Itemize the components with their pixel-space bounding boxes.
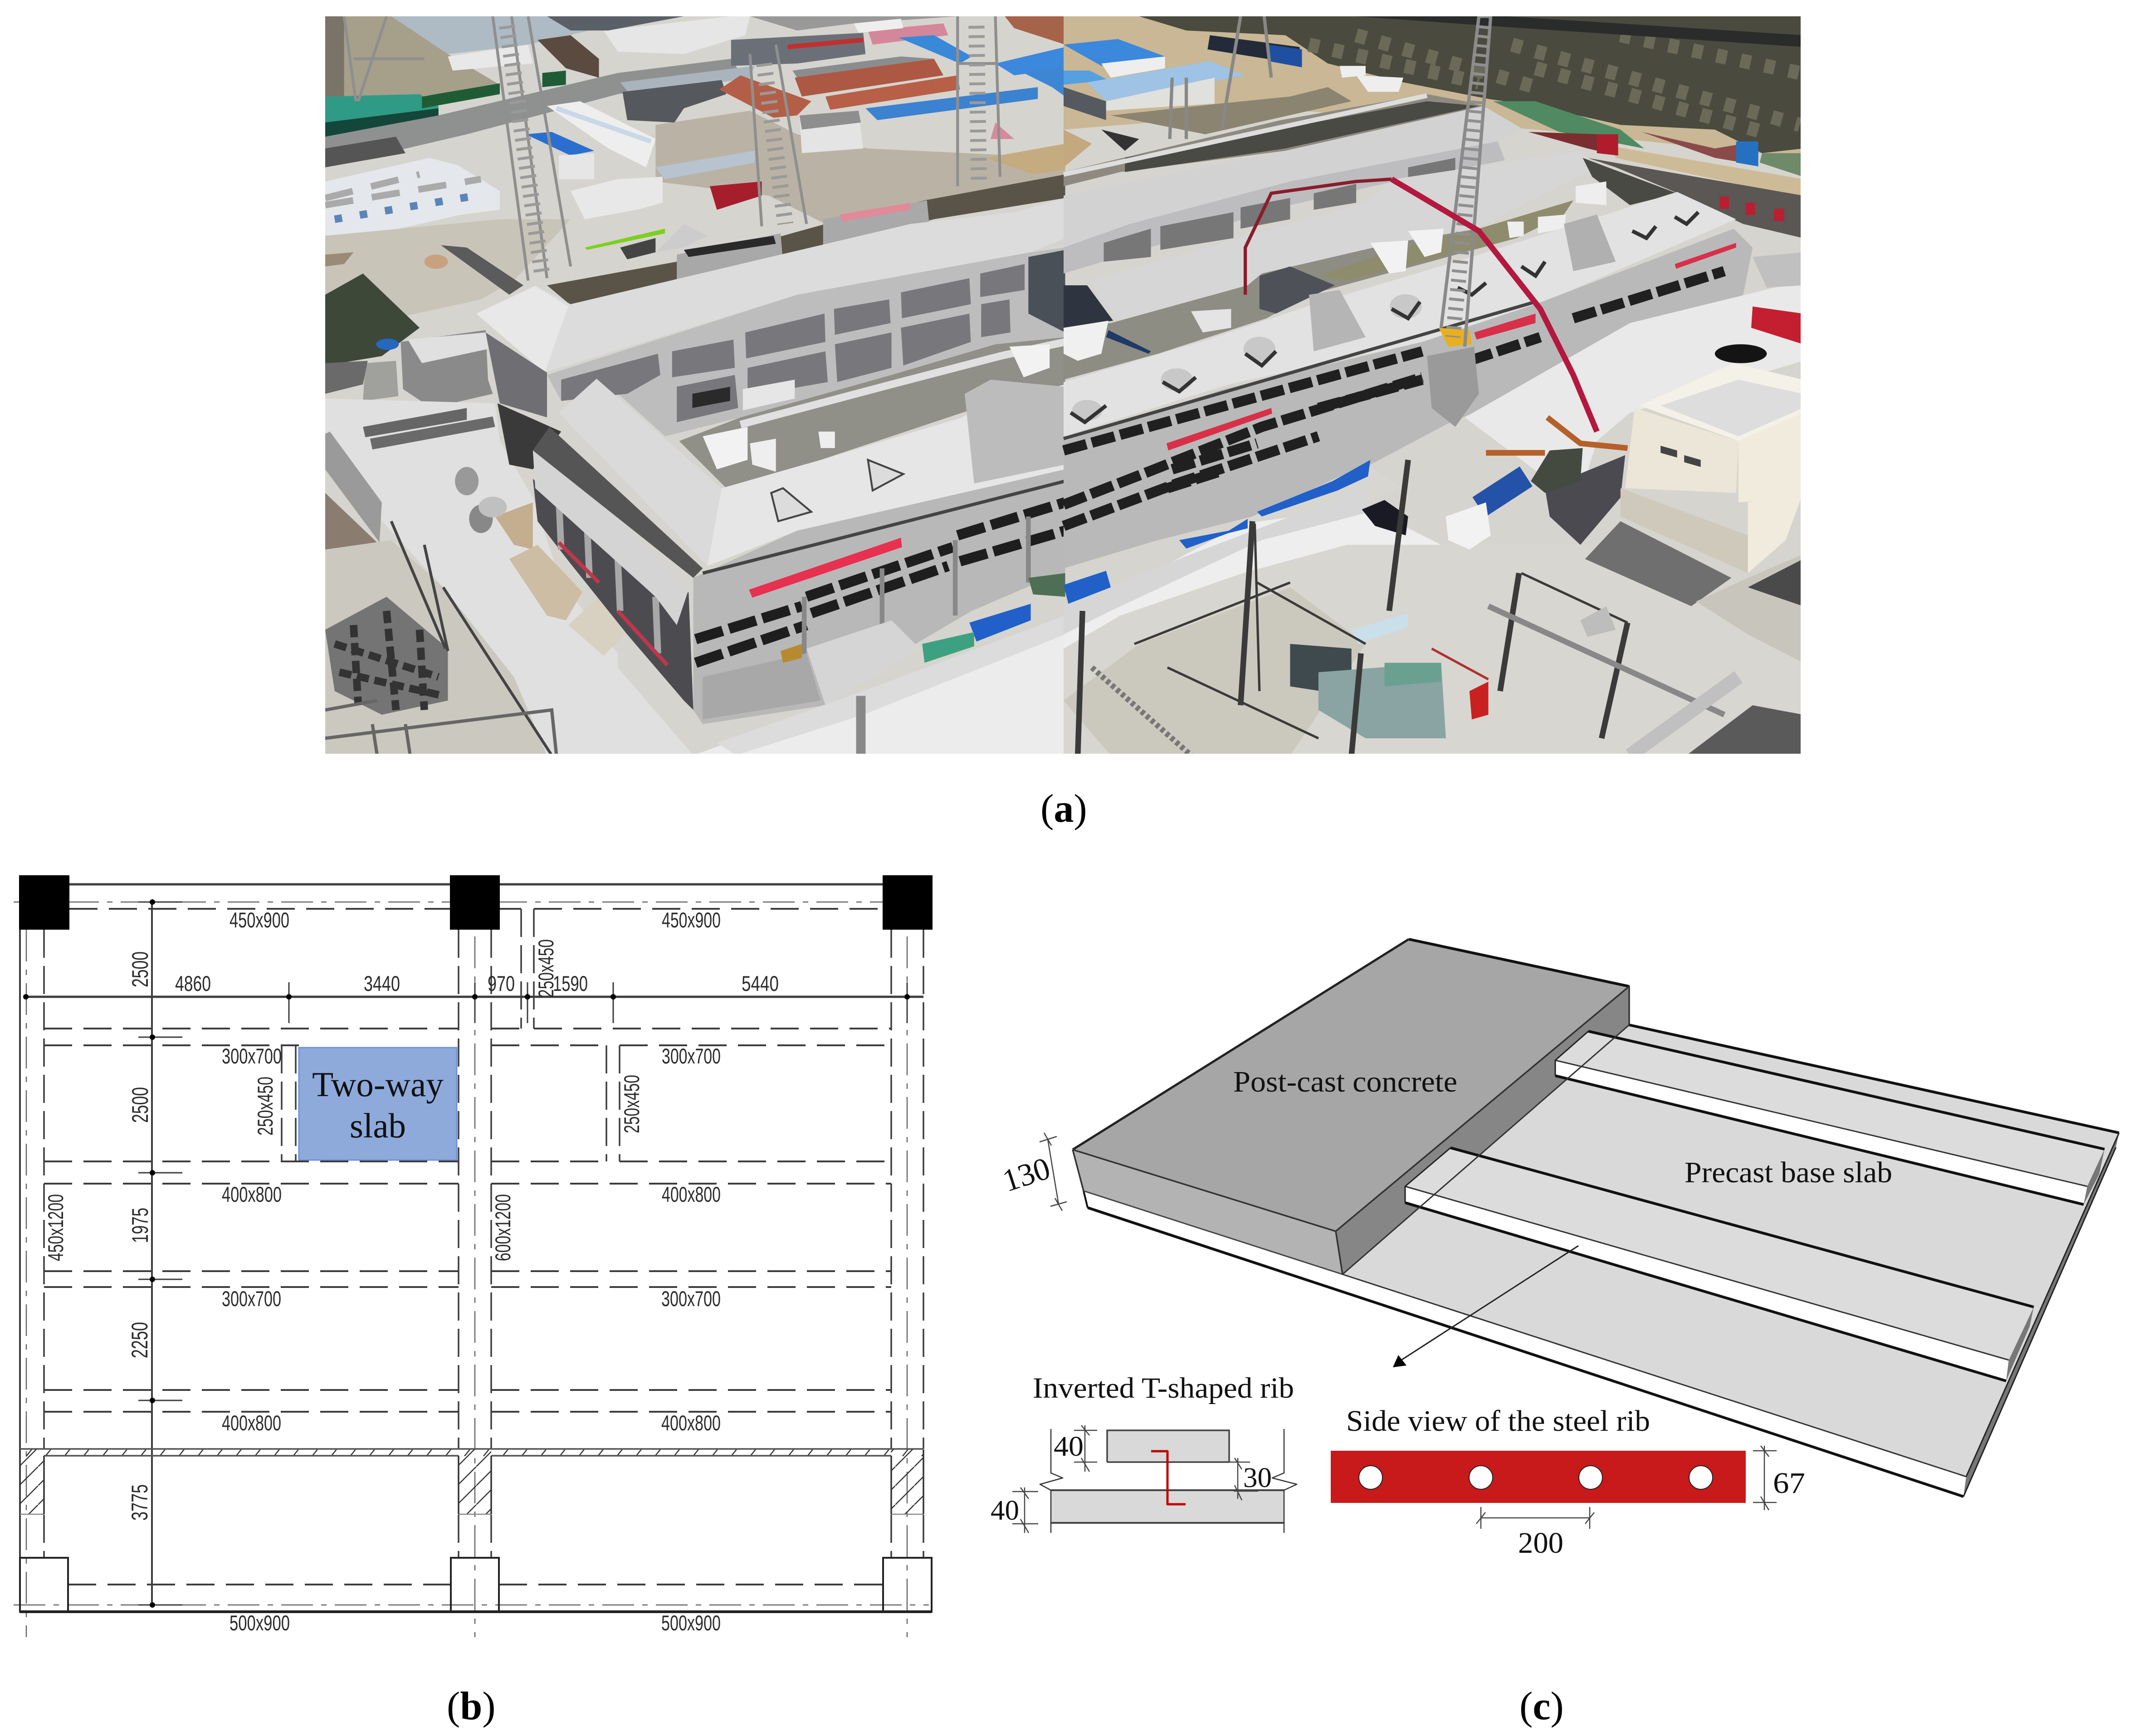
west facade <box>486 332 547 417</box>
dimension labels: 4860 <box>175 971 211 995</box>
caption b: (b) <box>447 1684 496 1728</box>
dimension labels: 970 <box>488 971 515 995</box>
tower <box>1441 16 1491 346</box>
right half of photo: pump truck, east wing, transformer yard, annex building <box>1064 16 1803 755</box>
inverted T rib section: 30 <box>1243 1463 1272 1493</box>
dimension 130: 130 <box>998 1151 1055 1199</box>
forecourt <box>693 620 1065 755</box>
precast base slab <box>1084 1025 2119 1497</box>
dimension labels: 2500 <box>127 1087 153 1123</box>
towers <box>344 16 1000 281</box>
two-way slab highlight: slab <box>350 1106 406 1145</box>
beam size labels: 450x900 <box>230 908 289 932</box>
label: side view of the steel rib: Side view of the steel rib <box>1346 1404 1650 1438</box>
dimension labels: 3440 <box>364 971 400 995</box>
caption c: (c) <box>1519 1684 1564 1728</box>
hatched wall band <box>20 1449 923 1514</box>
blue tarps <box>1064 460 1370 604</box>
arrow to rib detail <box>1393 1246 1578 1367</box>
ground, annex side <box>1465 281 1803 502</box>
inner roof <box>1089 151 1597 326</box>
annex building <box>1585 363 1803 663</box>
south roof <box>1064 192 1736 436</box>
steel rib side view <box>1331 1446 1805 1560</box>
beam size labels: 250x450 <box>253 1077 277 1136</box>
dimension labels: 3775 <box>127 1484 152 1521</box>
beam size labels: 450x1200 <box>44 1194 68 1261</box>
south facade east part <box>1064 229 1753 568</box>
dimension labels: 2250 <box>127 1322 152 1358</box>
left half of photo: yard, buildings and west end of the building under construction <box>325 16 1065 755</box>
panel c: composite slab isometric <box>991 939 2119 1560</box>
black columns <box>19 875 933 930</box>
steel rib side view: 200 <box>1518 1526 1563 1560</box>
lower columns <box>20 1558 932 1612</box>
forecourt and fence <box>1064 464 1803 755</box>
beam size labels: 250x450 <box>620 1075 644 1133</box>
dimension 130 <box>998 1133 1067 1211</box>
caption a: (a) <box>1040 787 1087 831</box>
beam size labels <box>44 908 721 1635</box>
dimensions 40, 30, 40 <box>1012 1425 1258 1533</box>
dimension labels <box>127 951 779 1521</box>
upper wing roof <box>476 198 1065 373</box>
back parapet and boxes <box>547 175 1065 305</box>
label: precast base slab: Precast base slab <box>1685 1156 1892 1189</box>
beam size labels: 250x450 <box>534 939 558 998</box>
road <box>325 399 693 755</box>
west and south roof <box>559 379 722 566</box>
beam size labels: 400x800 <box>222 1182 282 1206</box>
steel rib in red <box>1151 1451 1186 1504</box>
post-cast concrete block <box>1073 939 1629 1274</box>
transformer yard <box>1064 587 1366 755</box>
terrace <box>679 337 1065 488</box>
front rib <box>1405 1148 2034 1381</box>
inverted T rib section: 40 <box>991 1495 1019 1526</box>
dimension labels: 1590 <box>553 971 588 995</box>
beam size labels: 600x1200 <box>491 1194 515 1261</box>
upper wing facade <box>547 248 1065 436</box>
two-way slab highlight <box>299 1048 457 1160</box>
beam size labels: 300x700 <box>222 1287 281 1311</box>
post-cast concrete side face <box>1336 986 1629 1274</box>
beam size labels: 500x900 <box>230 1611 290 1635</box>
label: post-cast concrete: Post-cast concrete <box>1233 1065 1457 1098</box>
beam size labels: 300x700 <box>222 1044 282 1068</box>
south facade <box>693 469 1065 724</box>
inverted T rib section: 40 <box>1054 1431 1084 1462</box>
dimension labels: 5440 <box>742 971 779 995</box>
inverted T rib section <box>991 1425 1297 1533</box>
terrace <box>1064 200 1573 380</box>
steel rib side view: 67 <box>1773 1467 1805 1500</box>
dimension labels: 1975 <box>127 1208 153 1243</box>
beam size labels: 300x700 <box>662 1044 721 1068</box>
beam size labels: 400x800 <box>662 1182 721 1206</box>
back rib <box>1555 1031 2105 1204</box>
dimension labels: 2500 <box>127 951 153 987</box>
beam size labels: 500x900 <box>661 1611 721 1635</box>
label: inverted T-shaped rib: Inverted T-shaped rib <box>1033 1372 1294 1404</box>
mixer truck <box>1479 476 1526 507</box>
beam size labels: 450x900 <box>662 908 721 932</box>
upper wing, east part <box>1064 94 1484 186</box>
panel a: aerial photo of the construction site <box>325 16 1803 755</box>
panel b: structural floor plan <box>14 875 933 1637</box>
concrete pump boom <box>1245 179 1627 453</box>
two-way slab highlight: Two-way <box>312 1065 444 1104</box>
beam size labels: 400x800 <box>222 1411 281 1435</box>
beam size labels: 400x800 <box>661 1411 721 1435</box>
beam size labels: 300x700 <box>661 1287 721 1311</box>
